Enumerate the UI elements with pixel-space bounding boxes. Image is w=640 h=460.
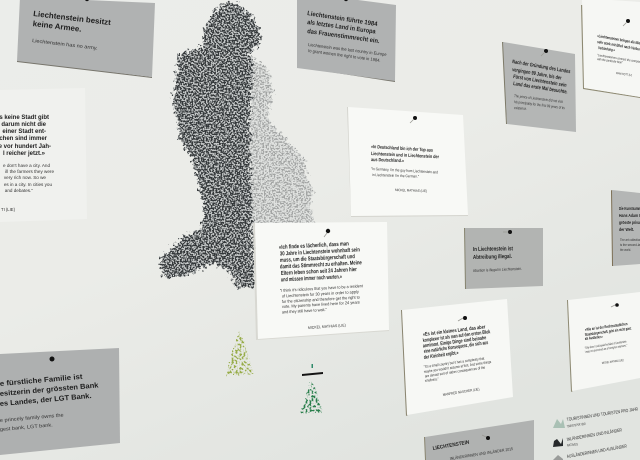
card: quote top right: MANI ROTT (LI) xyxy=(616,71,632,77)
card: Liechtenstein statistics xyxy=(424,420,534,460)
card: main quote thirty years: und müssen immer noch warten.» xyxy=(281,274,342,283)
card: quote Germany and Liechtenstein: "In Germany, I'm the guy from Liechtenstein and xyxy=(371,167,438,175)
card: women's vote 1984: das Frauenstimmrecht ein. xyxy=(307,28,380,45)
card: main quote thirty years: MICKEL MATHIAS (LIE) xyxy=(308,323,347,330)
icon: small green dot xyxy=(312,364,313,368)
card: prince first visit: The prince of Liechtenstein did not visit xyxy=(514,94,564,104)
card: main quote thirty years: damit das Stimmrecht zu erhalten. Meine xyxy=(280,260,363,270)
fraction bar xyxy=(302,372,323,376)
card: foreigner quote right: MICKEL MATHIAS (LIE) xyxy=(602,358,624,365)
legend: tourists, natives, foreigners: TOURISTS PER YEAR xyxy=(567,422,586,428)
legend: tourists, natives, foreigners: NATIVES xyxy=(567,442,579,447)
card: foreigner quote right: als Ausländer.» xyxy=(585,334,603,341)
icon: light green tree of dots xyxy=(227,331,254,375)
card: women's vote 1984: Liechtenstein was the last country in Europe xyxy=(308,42,387,57)
icon: dark green tree of dots xyxy=(301,381,323,413)
card: quote about no city: e vor hundert Jah- xyxy=(0,144,51,150)
card: main quote thirty years: Eltern leben schon seit 24 Jahren hier xyxy=(281,267,358,277)
card: no army xyxy=(17,0,155,78)
card: royal family LGT bank xyxy=(0,348,120,455)
card: quote about no city: l reicher jetzt.» xyxy=(3,151,46,157)
card: no army: keine Armee. xyxy=(32,19,82,34)
card: small complex country quote: are almost sort of rather consequences of the xyxy=(425,366,485,378)
card: small complex country quote: der Kleinheit ergibt.» xyxy=(423,350,459,361)
legend: tourists, natives, foreigners: INLÄNDERINNEN UND INLÄNDER xyxy=(566,426,623,442)
card: quote Germany and Liechtenstein xyxy=(347,107,468,217)
card: small complex country quote: komplexer ist als man auf den ersten Blick xyxy=(422,329,491,344)
card: quote top right xyxy=(581,0,640,98)
card: quote about no city: and debates." xyxy=(5,188,33,193)
card: main quote thirty years: "I think it's ridiculous that you have to be a resident xyxy=(280,283,364,293)
card: prince first visit: Nach der Gründung des Landes xyxy=(512,59,571,75)
card: main quote thirty years xyxy=(253,222,389,340)
card: women's vote 1984: Liechtenstein führte 1984 xyxy=(307,10,378,28)
card: royal family LGT bank: gest bank, LGT bank. xyxy=(0,422,53,433)
card: abortion illegal xyxy=(464,228,543,289)
card: art collection xyxy=(611,190,640,266)
card: quote Germany and Liechtenstein: aus Deutschland.» xyxy=(371,157,404,164)
card: royal family LGT bank: e fürstliche Familie ist xyxy=(0,372,84,388)
card: small complex country quote: «Es ist ein kleines Land, das aber xyxy=(423,324,486,338)
card: quote about no city: TI (LIE) xyxy=(1,207,16,212)
card: quote top right: Verbindung.» xyxy=(598,45,616,52)
card: small complex country quote: annimmt. Einige Dinge sind beinahe xyxy=(422,335,487,349)
card: quote about no city xyxy=(0,88,87,222)
card: prince first visit xyxy=(502,42,576,132)
native residents part of dot map xyxy=(160,2,260,287)
card: quote about no city: ill the farmers they were xyxy=(5,169,54,174)
card: main quote thirty years: 30 Jahre in Liechtenstein wohnhaft sein xyxy=(280,247,360,257)
card: prince first visit: his principality for the first 99 years of its xyxy=(514,100,565,110)
icon: natives xyxy=(553,438,563,447)
card: prince first visit: Land das erste Mal besuchte. xyxy=(513,81,568,96)
card: quote about no city: very rich now. So we xyxy=(4,175,46,180)
card: Liechtenstein statistics: LIECHTENSTEIN xyxy=(432,440,470,452)
card: quote Germany and Liechtenstein: in Liechtenstein I'm the German." xyxy=(372,173,420,179)
legend: tourists, natives, foreigners xyxy=(553,406,639,460)
card: small complex country quote xyxy=(401,299,513,416)
card: small complex country quote: smallness." xyxy=(425,377,439,383)
foreign residents part of dot map xyxy=(248,57,315,226)
card: royal family LGT bank: esitzerin der grössten Bank xyxy=(0,380,99,398)
card: abortion illegal: In Liechtenstein ist xyxy=(473,246,513,253)
card: prince first visit: existence. xyxy=(514,106,527,111)
card: main quote thirty years: and they still have to wait." xyxy=(282,307,327,314)
card: prince first visit: vergingen 99 Jahre, bis der xyxy=(512,67,562,82)
card: foreigner quote right xyxy=(567,292,640,392)
card: abortion illegal: Abortion is illegal in Liechtenstein. xyxy=(473,266,522,273)
card: main quote thirty years: muss, um die Staatsbürgerschaft und xyxy=(280,254,355,264)
card: quote top right: with the particular Man" xyxy=(597,57,623,65)
card: small complex country quote: maybe you wouldn't assume at first. And some things xyxy=(424,360,491,374)
card: small complex country quote: MANFRED NASCHER (LIE) xyxy=(443,387,480,397)
card: main quote thirty years: «Ich finde es lächerlich, dass man xyxy=(279,241,349,251)
card: royal family LGT bank: es Landes, der LGT Bank. xyxy=(0,391,92,408)
card: quote Germany and Liechtenstein: «In Deutschland bin ich der Top aus xyxy=(371,144,433,154)
card: women's vote 1984: to grant women the right to vote in 1984. xyxy=(308,48,381,63)
card: quote about no city: es in a city. In cities you xyxy=(4,182,52,187)
card: main quote thirty years: for the citizenship and therefore get the right to xyxy=(282,294,361,304)
card: small complex country quote: eine natürliche Konsequenz, die sich aus xyxy=(423,340,489,355)
card: no army: Liechtenstein besitzt xyxy=(33,9,112,27)
card: women's vote 1984: als letztes Land in Europa xyxy=(307,19,376,36)
icon: tourists xyxy=(553,419,565,428)
card: women's vote 1984 xyxy=(297,0,396,82)
card: main quote thirty years: vote. My parents have lived here for 24 years xyxy=(282,300,360,309)
card: quote Germany and Liechtenstein: MICKEL MATHIAS (LIE) xyxy=(395,188,427,193)
card: main quote thirty years: of Liechtenstein for 30 years in order to apply xyxy=(282,289,360,298)
card: art collection: der Welt. xyxy=(619,227,634,233)
card: quote about no city: e don't have a city. And xyxy=(3,163,50,168)
card: prince first visit: Fürst von Liechtenstein sein xyxy=(513,74,567,89)
dot map: Liechtenstein population xyxy=(160,2,315,287)
card: abortion illegal: Abtreibung illegal. xyxy=(473,254,512,261)
card: royal family LGT bank: e princely family owns the xyxy=(0,412,64,424)
card: quote Germany and Liechtenstein: Liechtenstein und in Liechtenstein der xyxy=(371,151,439,160)
card: small complex country quote: "It's a small country but it has a complexity that xyxy=(424,356,485,369)
card: art collection: the world. xyxy=(620,248,631,252)
icon: foreigners xyxy=(553,455,563,460)
card: quote about no city: einer Stadt ent- xyxy=(2,129,46,135)
card: no army: Liechtenstein has no army. xyxy=(32,38,98,52)
